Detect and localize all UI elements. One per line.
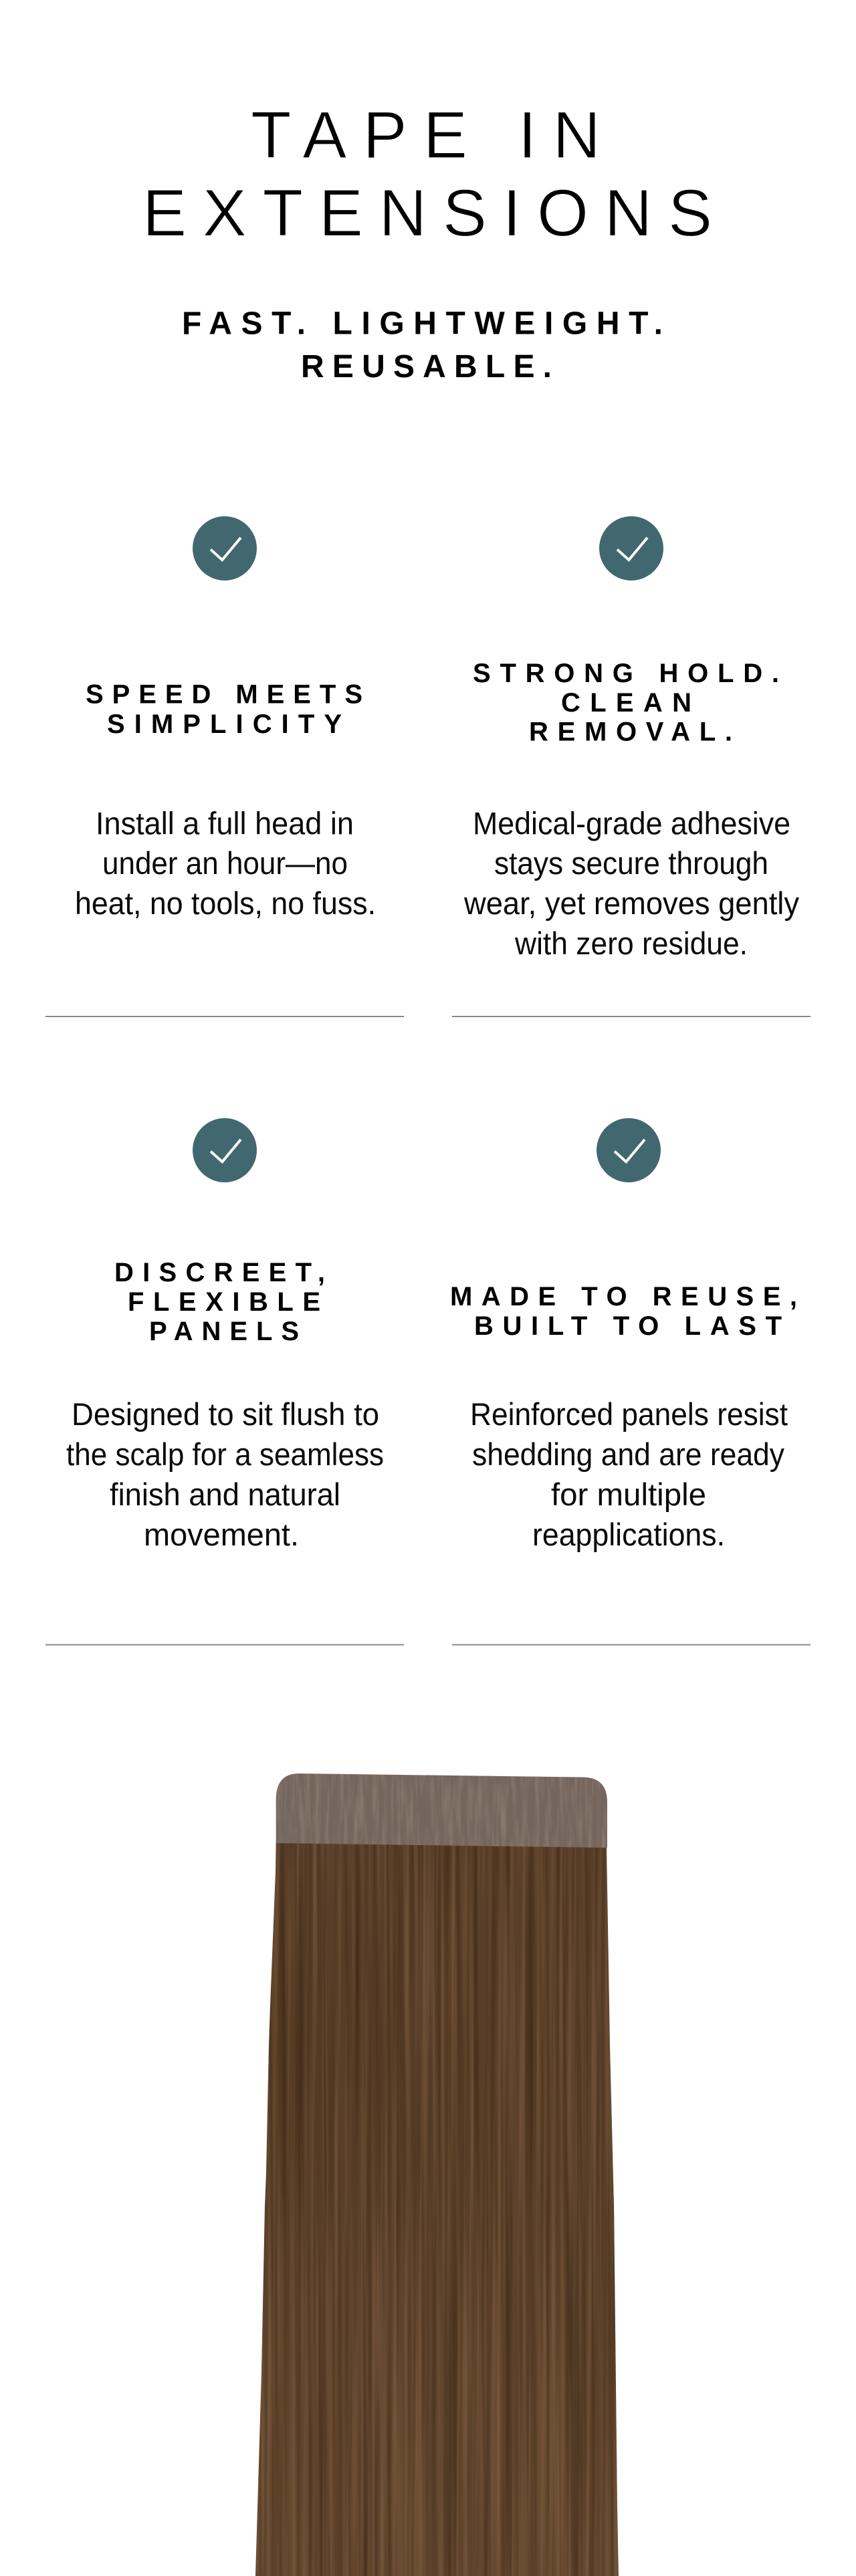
body text: discreet flexible panels: Designed to sit flush to (72, 1396, 379, 1432)
panel: made to reuse built to last (450, 1118, 811, 1645)
hair strands (247, 1839, 629, 2576)
subtitle (182, 306, 663, 385)
adhesive tape tab (274, 1772, 609, 1850)
title: TAPE IN (251, 98, 601, 172)
body text: strong hold clean removal: wear, yet removes gently (463, 885, 799, 921)
icon: check badge (597, 1118, 661, 1182)
heading: discreet flexible panels (114, 1258, 325, 1346)
panel: speed meets simplicity (45, 516, 404, 1017)
body text: discreet flexible panels: movement. (144, 1517, 299, 1552)
body text: made to reuse built to last: Reinforced panels resist (470, 1396, 788, 1432)
icon: check badge (193, 1118, 257, 1182)
body text: speed meets simplicity: Install a full head in (96, 805, 354, 841)
body text: strong hold clean removal (463, 805, 799, 961)
heading: made to reuse built to last: BUILT TO LAST (474, 1311, 782, 1341)
heading: made to reuse built to last (450, 1282, 797, 1341)
heading: discreet flexible panels: FLEXIBLE (128, 1287, 320, 1317)
heading: speed meets simplicity (86, 679, 362, 739)
product image: tape-in hair weft (247, 1772, 629, 2576)
title (142, 98, 712, 250)
heading: discreet flexible panels: PANELS (149, 1317, 299, 1346)
heading: speed meets simplicity: SPEED MEETS (86, 679, 362, 709)
body text: made to reuse built to last: shedding and are ready (472, 1436, 784, 1472)
heading: strong hold clean removal: REMOVAL. (529, 718, 732, 747)
heading: strong hold clean removal: CLEAN (561, 688, 691, 718)
subtitle: FAST. LIGHTWEIGHT. (182, 306, 663, 341)
body text: speed meets simplicity: heat, no tools, no fuss. (75, 885, 376, 921)
body text: made to reuse built to last: for multiple (551, 1477, 706, 1512)
icon: check badge (599, 516, 663, 580)
panel: discreet flexible panels (45, 1118, 404, 1645)
heading: speed meets simplicity: SIMPLICITY (107, 710, 342, 739)
heading: strong hold clean removal: STRONG HOLD. (473, 659, 779, 688)
subtitle: REUSABLE. (301, 349, 552, 385)
body text: speed meets simplicity: under an hour—no (102, 845, 348, 881)
body text: speed meets simplicity (75, 805, 376, 921)
body text: made to reuse built to last: reapplications. (532, 1517, 725, 1552)
heading: discreet flexible panels: DISCREET, (114, 1258, 325, 1287)
body text: discreet flexible panels (66, 1396, 384, 1552)
body text: strong hold clean removal: Medical-grade adhesive (473, 805, 790, 841)
title: EXTENSIONS (142, 175, 712, 250)
body text: strong hold clean removal: stays secure through (494, 845, 768, 881)
body text: strong hold clean removal: with zero residue. (514, 926, 748, 961)
body text: made to reuse built to last (470, 1396, 788, 1552)
body text: discreet flexible panels: finish and natural (110, 1477, 340, 1512)
body text: discreet flexible panels: the scalp for a seamless (66, 1436, 384, 1472)
icon: check badge (193, 516, 257, 580)
heading: strong hold clean removal (473, 659, 779, 747)
heading: made to reuse built to last: MADE TO REUSE, (450, 1282, 797, 1311)
panel: strong hold clean removal (452, 516, 811, 1017)
